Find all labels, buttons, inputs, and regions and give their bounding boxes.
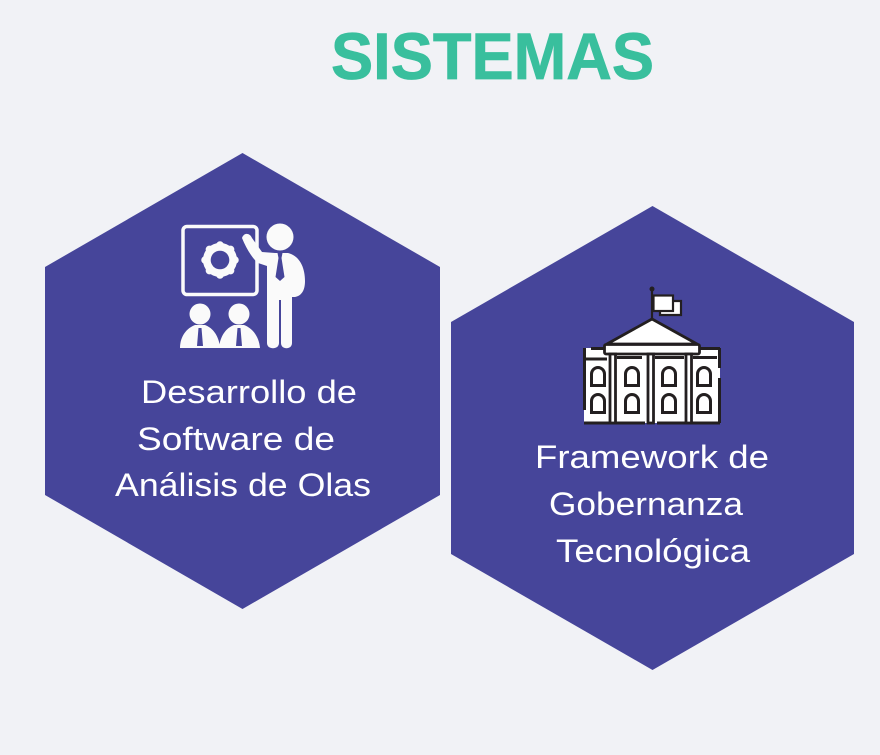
columns: [610, 354, 692, 423]
label: governance: [535, 439, 769, 569]
label: software: Software de: [137, 421, 335, 457]
label: governance: Framework de: [535, 439, 769, 475]
audience member right: [219, 304, 260, 348]
label: software: Desarrollo de: [141, 374, 357, 410]
roof: [607, 319, 697, 344]
presenter: [242, 224, 305, 348]
board: [183, 226, 257, 294]
panel: technology governance: [451, 206, 854, 670]
hexagon: left: [45, 153, 440, 609]
building body: [584, 348, 720, 423]
entablature: [604, 344, 700, 354]
label: software: [115, 374, 371, 503]
label: governance: Tecnológica: [556, 533, 750, 569]
building outline strokes: [584, 348, 720, 423]
gear: [205, 245, 235, 275]
flag: [650, 286, 681, 319]
icon: presenter with gear board and audience: [180, 224, 305, 348]
audience member left: [180, 304, 220, 348]
hexagon: right: [451, 206, 854, 670]
panel: software development: [45, 153, 440, 609]
title: SISTEMAS: [331, 19, 654, 93]
label: software: Análisis de Olas: [115, 467, 371, 503]
label: governance: Gobernanza: [549, 486, 743, 522]
windows: [592, 368, 710, 412]
icon: government building with flag: [584, 286, 720, 423]
